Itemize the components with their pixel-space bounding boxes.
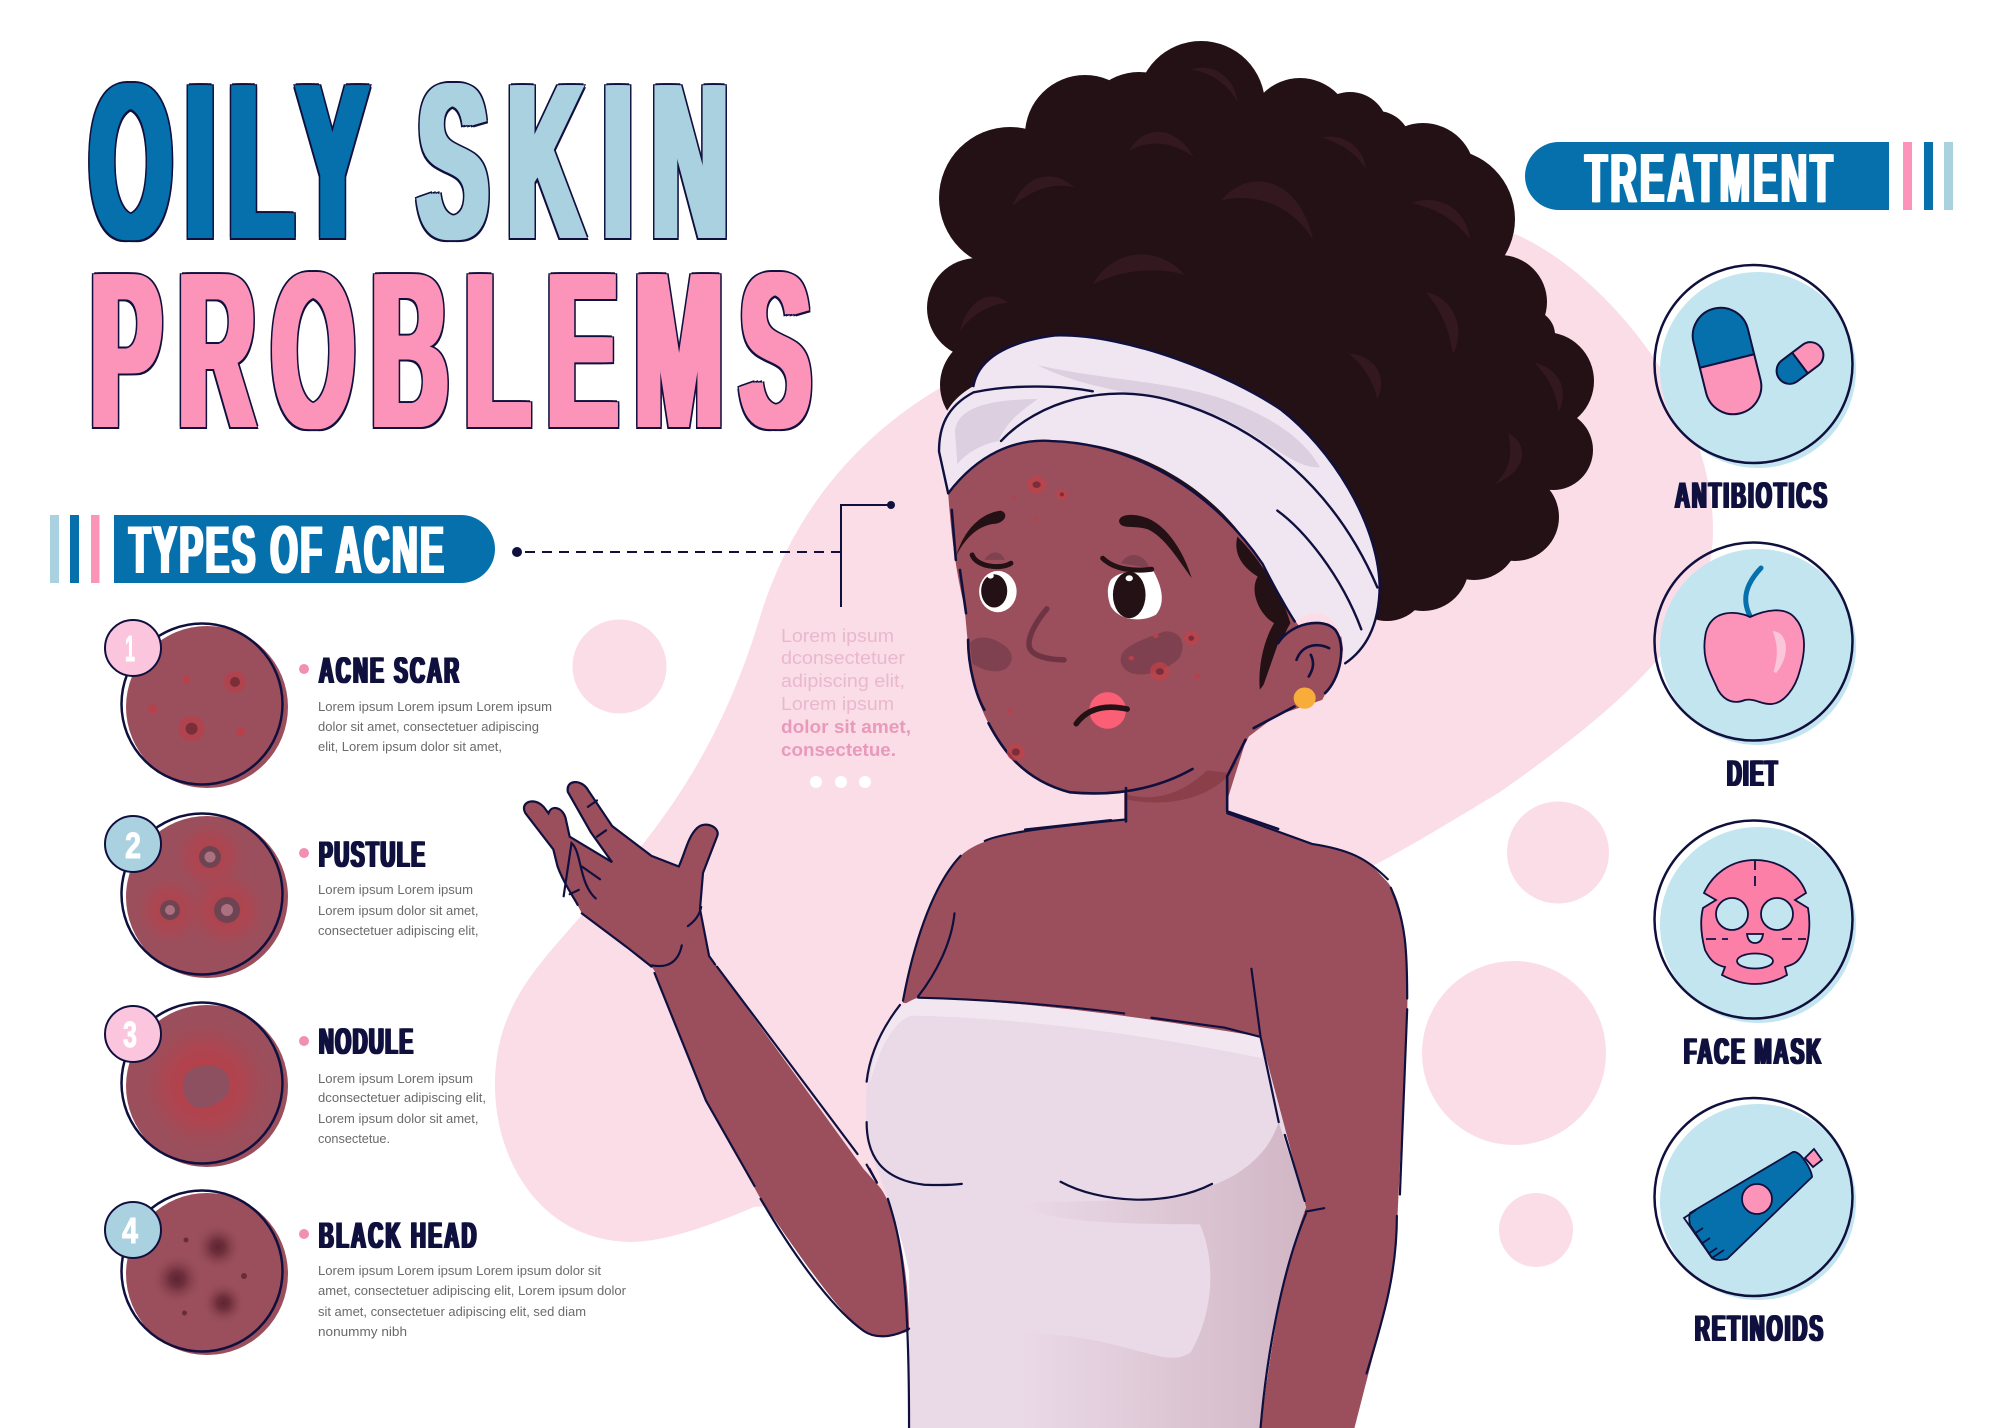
side hair bbox=[1236, 537, 1290, 690]
heading bar: types of acne bbox=[50, 515, 495, 583]
acne type 1: acne scar bbox=[105, 620, 288, 788]
acne text: pustule bbox=[299, 848, 478, 938]
acne type 3: nodule bbox=[105, 1002, 288, 1167]
acne text: pustule: consectetuer adipiscing elit, bbox=[318, 923, 478, 938]
label: acne scar: ACNE SCAR bbox=[319, 650, 461, 691]
earring bbox=[1294, 687, 1316, 709]
acne text: black head: nonummy nibh bbox=[318, 1324, 407, 1339]
treatment: face mask bbox=[1654, 820, 1856, 1023]
icon: apple bbox=[1704, 568, 1804, 704]
acne text: nodule bbox=[299, 1036, 486, 1146]
acne text: nodule: Lorem ipsum dolor sit amet, bbox=[318, 1111, 478, 1126]
cheeks bbox=[970, 631, 1183, 675]
badge 4 bbox=[105, 1202, 161, 1258]
acne text: black head: Lorem ipsum Lorem ipsum Lorem ipsum dolor sit bbox=[318, 1263, 601, 1278]
facial features bbox=[952, 476, 1341, 830]
acne type 2: pustule bbox=[105, 814, 288, 978]
label: antibiotics: ANTIBIOTICS bbox=[1675, 475, 1829, 516]
callout text: dolor sit amet, bbox=[781, 717, 911, 737]
acne text: black head: sit amet, consectetuer adipiscing elit, sed diam bbox=[318, 1304, 586, 1319]
acne type 4: black head bbox=[105, 1190, 288, 1355]
nose bbox=[1029, 609, 1064, 660]
hair highlights bbox=[960, 68, 1563, 484]
callout text: consectetue. bbox=[781, 740, 896, 760]
label: nodule: NODULE bbox=[319, 1021, 414, 1062]
woman illustration bbox=[524, 41, 1594, 1428]
left eye bbox=[972, 552, 1017, 612]
towel headband bbox=[938, 335, 1380, 663]
title: PROBLEMS: PROBLEMS bbox=[91, 227, 828, 475]
icon: cream tube bbox=[1684, 1149, 1822, 1260]
acne text: black head bbox=[299, 1229, 627, 1339]
acne text: acne scar: Lorem ipsum Lorem ipsum Lorem ipsum bbox=[318, 699, 552, 714]
badge 1: 1 bbox=[125, 628, 135, 669]
badge 3 bbox=[105, 1006, 161, 1062]
heading: types of acne: TYPES OF ACNE bbox=[129, 512, 446, 588]
label: diet: DIET bbox=[1727, 753, 1779, 794]
acne text: acne scar: dolor sit amet, consectetuer adipiscing bbox=[318, 719, 539, 734]
badge 1 bbox=[105, 620, 161, 676]
treatment: diet bbox=[1654, 542, 1856, 745]
treatment: antibiotics bbox=[1654, 265, 1856, 468]
background pink blob bbox=[495, 234, 1713, 1242]
facial acne spots bbox=[1007, 476, 1200, 761]
callout text: dconsectetuer bbox=[781, 648, 905, 668]
label: face mask: FACE MASK bbox=[1684, 1031, 1823, 1072]
ear bbox=[1254, 623, 1341, 728]
hair bbox=[927, 41, 1594, 621]
badge 3: 3 bbox=[123, 1014, 137, 1055]
decorative pink circles bbox=[572, 620, 1609, 1267]
face bbox=[948, 441, 1345, 795]
callout text bbox=[781, 626, 911, 788]
label: black head: BLACK HEAD bbox=[319, 1215, 479, 1256]
neck bbox=[1125, 731, 1249, 825]
icon: sheet mask bbox=[1701, 860, 1809, 984]
heading bar: treatment bbox=[1525, 142, 1953, 210]
dress bbox=[866, 998, 1306, 1428]
acne text: nodule: dconsectetuer adipiscing elit, bbox=[318, 1090, 486, 1105]
callout text: Lorem ipsum bbox=[781, 626, 894, 646]
badge 2: 2 bbox=[125, 825, 141, 866]
callout connector line bbox=[512, 501, 895, 607]
icon: capsules bbox=[1687, 302, 1829, 420]
arm and hand bbox=[524, 782, 909, 1336]
badge 2 bbox=[105, 816, 161, 872]
body outlines bbox=[524, 782, 1407, 1428]
acne text: nodule: Lorem ipsum Lorem ipsum bbox=[318, 1071, 473, 1086]
treatment: retinoids bbox=[1654, 1098, 1856, 1300]
acne text: pustule: Lorem ipsum dolor sit amet, bbox=[318, 903, 478, 918]
callout text: adipiscing elit, bbox=[781, 671, 905, 691]
callout text: Lorem ipsum bbox=[781, 694, 894, 714]
mouth bbox=[1076, 692, 1127, 729]
acne text: nodule: consectetue. bbox=[318, 1131, 390, 1146]
right eye bbox=[1103, 555, 1162, 619]
acne text: black head: amet, consectetuer adipiscing elit, Lorem ipsum dolor bbox=[318, 1283, 627, 1298]
acne text: acne scar: elit, Lorem ipsum dolor sit amet, bbox=[318, 739, 502, 754]
acne text: pustule: Lorem ipsum Lorem ipsum bbox=[318, 882, 473, 897]
label: retinoids: RETINOIDS bbox=[1695, 1308, 1825, 1349]
label: pustule: PUSTULE bbox=[319, 834, 427, 875]
acne text: acne scar bbox=[299, 664, 552, 754]
badge 4: 4 bbox=[122, 1210, 138, 1251]
heading: treatment: TREATMENT bbox=[1585, 139, 1836, 217]
title: OILY: OILY bbox=[90, 38, 382, 286]
body and shoulders bbox=[524, 743, 1407, 1428]
title: SKIN: SKIN bbox=[418, 38, 748, 286]
eyebrows bbox=[956, 511, 1192, 578]
